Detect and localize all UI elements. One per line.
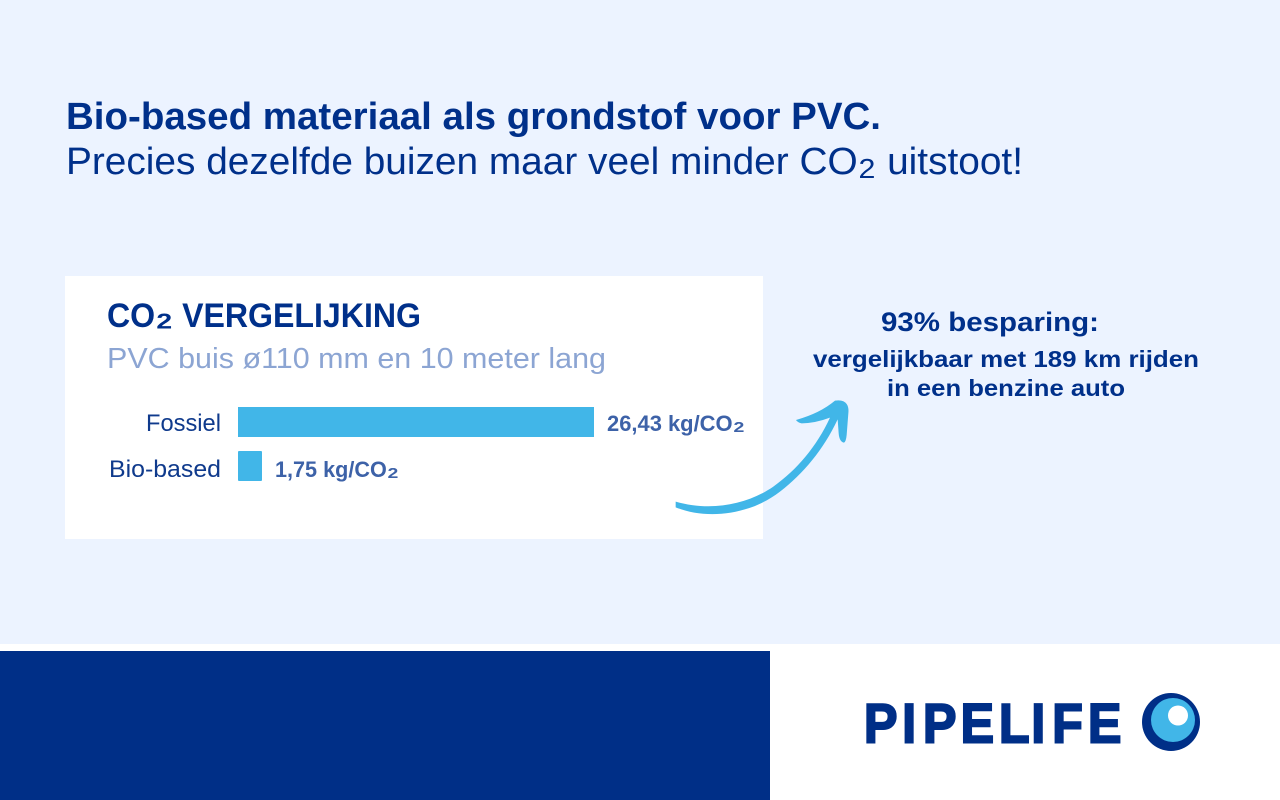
bar: Fossiel <box>238 407 594 437</box>
callout line 2: in een benzine auto <box>887 375 1125 401</box>
callout heading: 93% besparing: <box>881 307 1099 337</box>
title line 2: Precies dezelfde buizen maar veel minder CO ₂ uitstoot! <box>66 131 1023 184</box>
bar chart <box>109 406 745 483</box>
footer: navy block <box>0 651 770 800</box>
value: Fossiel: 26,43 kg/CO₂ <box>607 406 745 437</box>
callout: savings <box>813 307 1199 401</box>
logo: Pipelife <box>864 693 1200 755</box>
logo wordmark: PIPELIFE <box>864 693 1122 755</box>
title <box>66 96 1023 184</box>
value: Bio-based: 1,75 kg/CO₂ <box>275 452 399 483</box>
panel subtitle: PVC buis ø110 mm en 10 meter lang <box>107 343 606 375</box>
callout line 1: vergelijkbaar met 189 km rijden <box>813 346 1199 372</box>
footer: white band <box>0 644 1280 800</box>
panel: CO2 comparison <box>65 276 763 539</box>
panel heading: CO₂ VERGELIJKING <box>107 289 421 337</box>
label: Bio-based: Bio-based <box>109 456 221 483</box>
arrow <box>676 400 848 514</box>
title line 1: Bio-based materiaal als grondstof voor PVC. <box>66 96 881 138</box>
label: Fossiel: Fossiel <box>146 410 221 437</box>
logo icon <box>1142 693 1200 751</box>
bar: Bio-based <box>238 451 262 481</box>
